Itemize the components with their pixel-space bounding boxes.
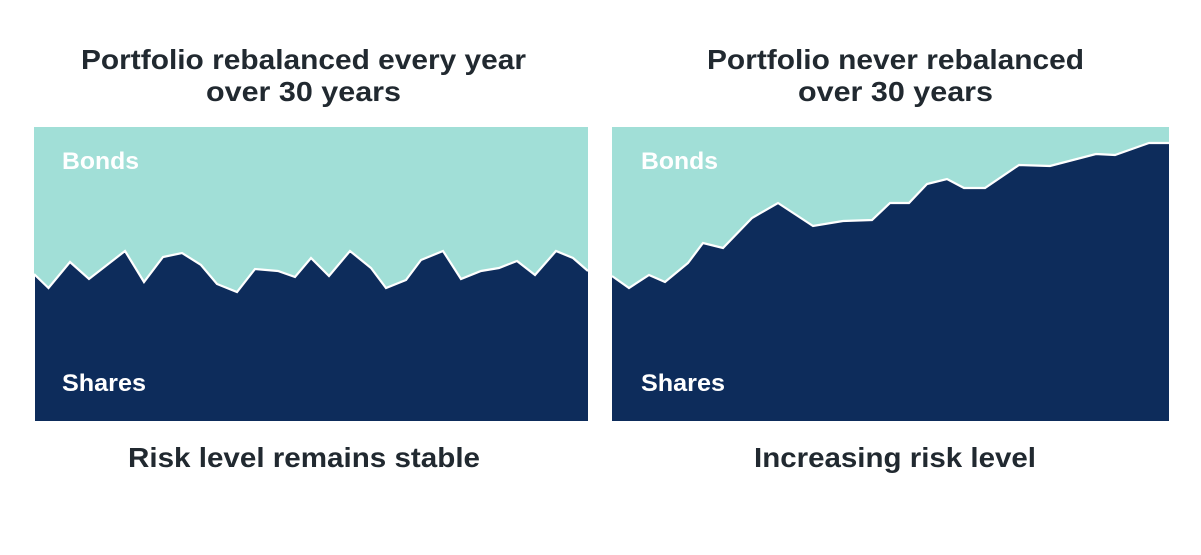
heading: rebalanced portfolio: Portfolio rebalanced every year [81, 44, 526, 75]
label: bonds: Bonds [641, 148, 718, 175]
heading: rebalanced portfolio: over 30 years [206, 76, 401, 107]
boundary line [612, 143, 1169, 288]
bonds area [612, 127, 1169, 297]
label: shares: Shares [641, 370, 725, 397]
panel: portfolio rebalanced every year [34, 44, 588, 473]
label: shares: Shares [62, 370, 146, 397]
heading: never rebalanced portfolio [707, 44, 1084, 107]
shares area [35, 251, 588, 421]
caption: increasing risk: Increasing risk level [754, 442, 1036, 473]
heading: rebalanced portfolio [81, 44, 526, 107]
area chart: rebalanced allocation [34, 127, 588, 421]
shares area [612, 143, 1169, 421]
panel: portfolio never rebalanced [612, 44, 1169, 473]
boundary line [34, 251, 588, 292]
heading: never rebalanced portfolio: over 30 years [798, 76, 993, 107]
label: bonds: Bonds [62, 148, 139, 175]
heading: never rebalanced portfolio: Portfolio never rebalanced [707, 44, 1084, 75]
caption: risk stable: Risk level remains stable [128, 442, 480, 473]
bonds area [34, 127, 588, 292]
area chart: never rebalanced allocation [612, 127, 1169, 421]
